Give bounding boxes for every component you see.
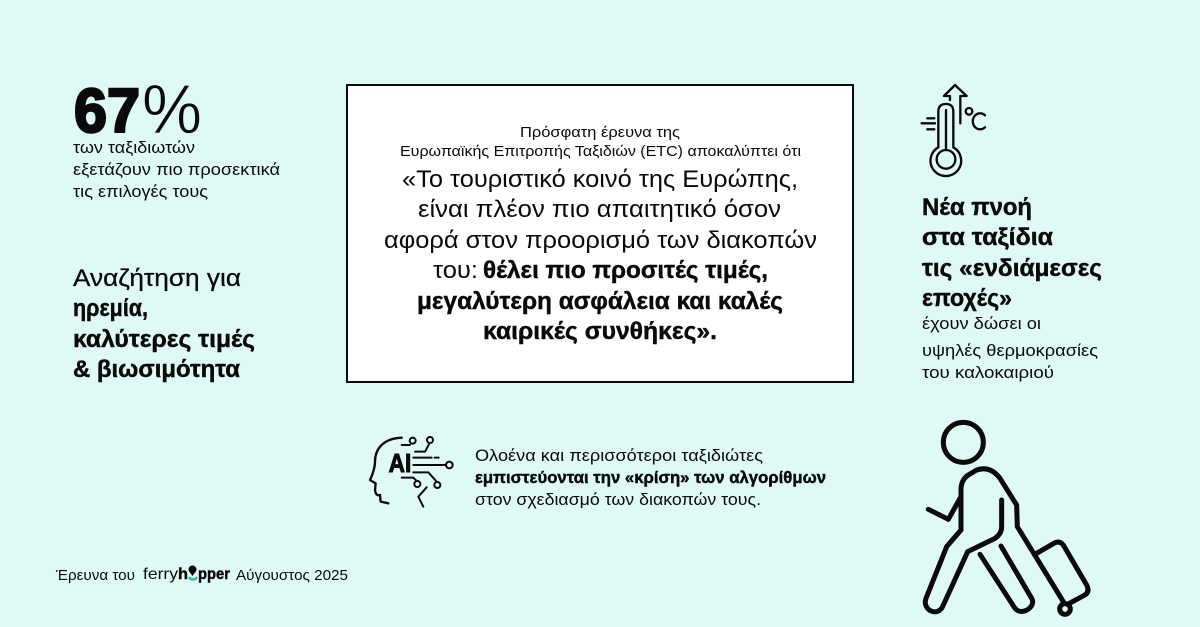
text block: search for calm, better prices, sustainability	[73, 265, 255, 383]
ferryhopper logo: h	[178, 566, 188, 583]
text block: travellers trust algorithms: εμπιστεύονται την «κρίση» των αλγορίθμων	[475, 468, 826, 487]
footer: survey credit with ferryhopper logo	[55, 566, 348, 584]
panel: central quote box	[347, 85, 853, 382]
statistic: 67% of travellers	[73, 70, 280, 201]
quote text	[384, 166, 817, 345]
shoulder season caption: έχουν δώσει οι	[922, 314, 1041, 333]
text block: new breath for shoulder-season travel	[922, 194, 1102, 382]
shoulder season heading: τις «ενδιάμεσες	[922, 255, 1102, 282]
quote text: είναι πλέον πιο απαιτητικό όσον	[418, 196, 781, 223]
icon: thermometer with rising temperature	[922, 85, 985, 176]
icon: AI head with circuit lines	[370, 437, 453, 507]
statistic caption: εξετάζουν πιο προσεκτικά	[73, 160, 280, 179]
ferryhopper logo: ferry	[143, 566, 178, 583]
shoulder season caption: υψηλές θερμοκρασίες	[922, 341, 1098, 360]
text block: search for calm, better prices, sustainability: Αναζήτηση για	[73, 265, 241, 292]
quote text: καιρικές συνθήκες».	[483, 318, 717, 345]
statistic caption	[73, 138, 280, 201]
text block: search for calm, better prices, sustainability: καλύτερες τιμές	[73, 326, 255, 353]
quote introduction: Πρόσφατη έρευνα της	[520, 124, 680, 141]
text block: travellers trust algorithms: στον σχεδιασμό των διακοπών τους.	[475, 490, 761, 509]
footer: survey credit with ferryhopper logo: Αύγουστος 2025	[236, 567, 348, 584]
icon: AI head with circuit lines: AI	[389, 448, 411, 478]
shoulder season heading: Νέα πνοή	[922, 194, 1032, 221]
big number 67: 67	[74, 77, 140, 146]
text block: travellers trust algorithms	[475, 446, 826, 509]
shoulder season heading: στα ταξίδια	[922, 224, 1053, 251]
quote box frame	[347, 85, 853, 382]
quote text: «Το τουριστικό κοινό της Ευρώπης,	[402, 166, 798, 193]
icon: traveller walking with suitcase	[925, 422, 1088, 614]
shoulder season caption: του καλοκαιριού	[922, 363, 1054, 382]
quote text: του:	[433, 257, 478, 284]
ferryhopper logo	[143, 566, 230, 583]
quote text: μεγαλύτερη ασφάλεια και καλές	[417, 288, 783, 315]
text block: search for calm, better prices, sustainability: & βιωσιμότητα	[73, 356, 240, 383]
shoulder season caption	[922, 314, 1098, 382]
shoulder season heading	[922, 194, 1102, 312]
quote text: αφορά στον προορισμό των διακοπών	[384, 227, 817, 254]
footer: survey credit with ferryhopper logo: Έρευνα του	[55, 567, 135, 584]
quote introduction: Ευρωπαϊκής Επιτροπής Ταξιδιών (ETC) αποκαλύπτει ότι	[400, 143, 801, 160]
percent sign: %	[142, 70, 202, 148]
shoulder season heading: εποχές»	[922, 285, 1012, 312]
text block: travellers trust algorithms: Ολοένα και περισσότεροι ταξιδιώτες	[475, 446, 763, 465]
ferryhopper logo: pper	[198, 566, 230, 583]
quote text: θέλει πιο προσιτές τιμές,	[483, 257, 768, 284]
quote introduction	[400, 124, 801, 160]
statistic caption: τις επιλογές τους	[73, 182, 208, 201]
text block: search for calm, better prices, sustainability: ηρεμία,	[73, 295, 148, 322]
statistic caption: των ταξιδιωτών	[73, 138, 195, 157]
